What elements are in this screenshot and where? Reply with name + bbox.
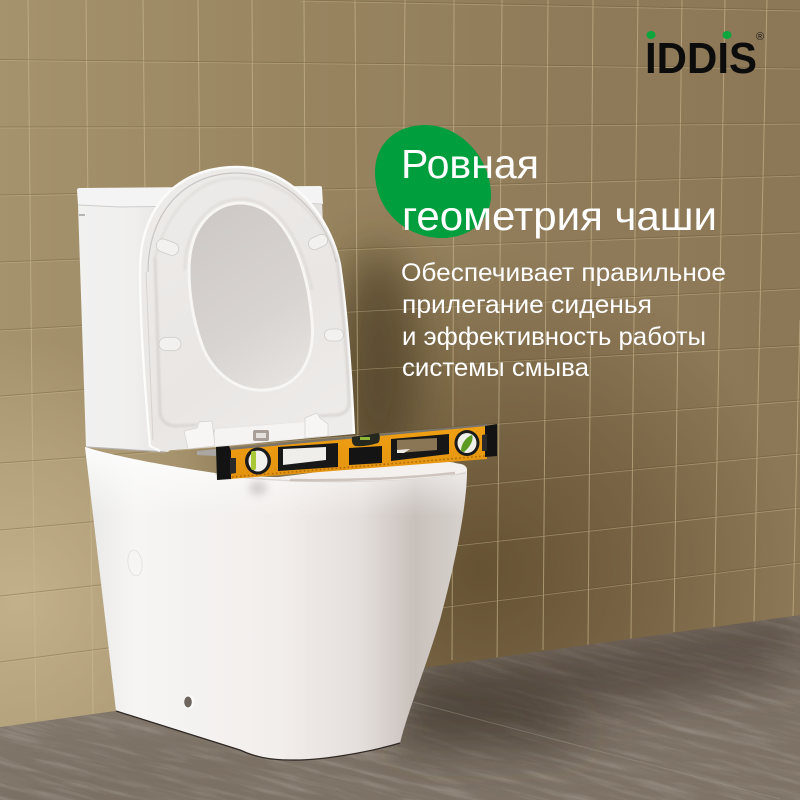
left vial [245, 448, 271, 474]
stone floor [0, 615, 800, 800]
centre block [349, 446, 382, 465]
cistern tank [77, 186, 326, 452]
heading [401, 141, 717, 239]
logo: IDDIS: IDDIS [645, 34, 757, 83]
body text: и эффективность работы [402, 323, 706, 351]
raised seat lid [140, 167, 354, 456]
body text [401, 259, 726, 382]
side plug [126, 549, 144, 577]
left window [278, 443, 338, 471]
right vial [454, 430, 480, 456]
bowl body [85, 447, 467, 760]
body text: системы смыва [402, 354, 589, 382]
heading: геометрия чаши [402, 193, 717, 239]
fixing hole [184, 695, 194, 709]
body text: Обеспечивает правильное [401, 259, 726, 287]
logo: IDDIS: ® [756, 31, 764, 43]
body text: прилегание сиденья [402, 291, 652, 319]
rubber bumpers [154, 232, 344, 350]
seat hinges [184, 413, 328, 456]
seat edge on bowl [270, 461, 467, 481]
green accent blob [375, 125, 491, 238]
centre bubble vial [352, 433, 380, 446]
seat opening [189, 203, 312, 390]
toilet [77, 167, 467, 760]
heading: Ровная [401, 141, 539, 187]
right end cap [485, 424, 497, 457]
spirit level tool [216, 424, 497, 480]
right window [391, 434, 449, 461]
left end cap [216, 446, 231, 480]
